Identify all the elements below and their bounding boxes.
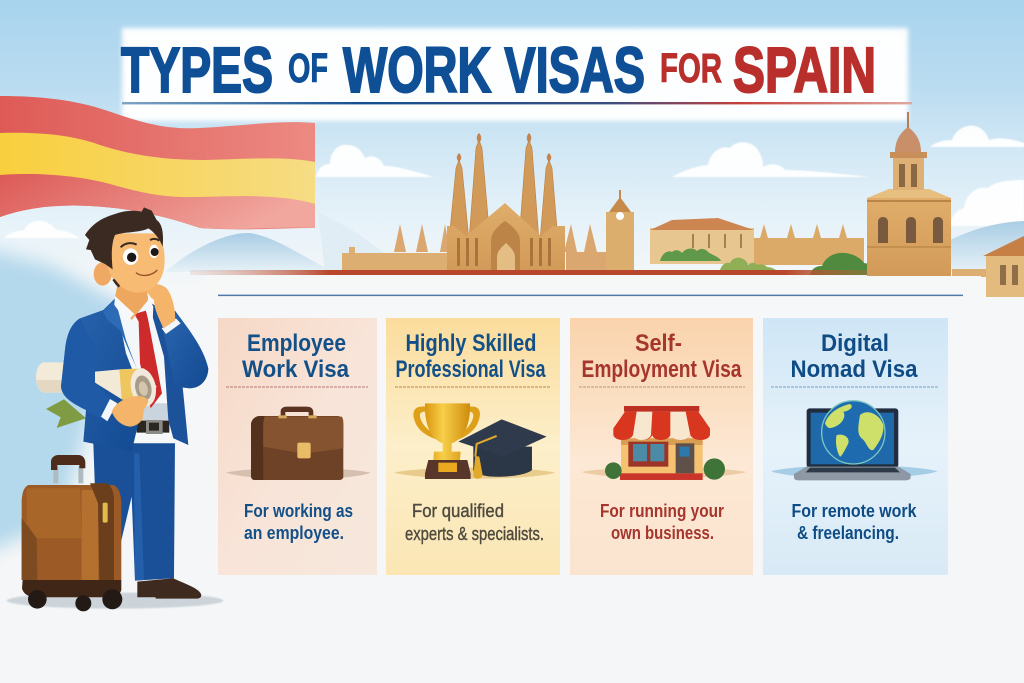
- icon: laptop with globe: [771, 401, 938, 480]
- ground line: [190, 270, 890, 275]
- face: [107, 233, 165, 293]
- heading: Self-: [635, 330, 682, 357]
- city skyline: [190, 112, 1024, 297]
- panel: digital nomad visa: [763, 318, 948, 575]
- description: [600, 500, 724, 543]
- description: experts & specialists.: [405, 523, 544, 544]
- heading: Employee: [247, 330, 346, 357]
- bell tower: [867, 112, 951, 276]
- heading: [790, 330, 918, 383]
- title: OF: [288, 45, 328, 91]
- heading: Highly Skilled: [406, 330, 536, 357]
- scroll in arm: [95, 366, 159, 409]
- description: & freelancing.: [797, 522, 899, 543]
- hair: [85, 207, 163, 269]
- description: For qualified: [412, 500, 504, 521]
- suitcase: [22, 483, 122, 611]
- palace: [650, 218, 754, 264]
- panel: highly skilled professional visa: [386, 318, 560, 575]
- heading: [242, 330, 350, 383]
- description: For working as: [244, 500, 353, 521]
- tie: [134, 311, 162, 408]
- title: SPAIN: [733, 34, 876, 106]
- panel: self-employment visa: [570, 318, 753, 575]
- cathedral: [342, 133, 606, 271]
- icon: trophy and graduation cap: [394, 403, 555, 479]
- character: traveller: [7, 207, 223, 611]
- title banner: [121, 28, 912, 121]
- sleeve over scroll: [61, 318, 113, 420]
- scroll behind the body: [36, 362, 67, 393]
- distant mountains: [165, 212, 1024, 272]
- heading: Work Visa: [242, 356, 350, 383]
- description: For remote work: [792, 500, 917, 521]
- description: [792, 500, 917, 543]
- raised hand: [146, 284, 175, 328]
- description: an employee.: [244, 522, 344, 543]
- title: [121, 34, 876, 106]
- forearm sleeve: [163, 311, 208, 388]
- smile: [136, 270, 157, 275]
- description: [244, 500, 353, 543]
- heading: [582, 330, 742, 383]
- heading: Digital: [821, 330, 889, 357]
- icon: shop: [582, 406, 746, 480]
- arcade: [754, 224, 864, 265]
- panel: employee work visa: [218, 318, 377, 575]
- clouds: [4, 126, 1024, 238]
- title: TYPES: [121, 34, 273, 106]
- heading: Employment Visa: [582, 356, 742, 383]
- description: [405, 500, 544, 544]
- title: WORK VISAS: [343, 34, 645, 106]
- title: FOR: [660, 45, 722, 91]
- description: own business.: [611, 522, 714, 543]
- icon: briefcase: [226, 407, 371, 480]
- clock tower: [606, 190, 634, 271]
- neck: [115, 285, 148, 320]
- Spanish flag: [0, 96, 315, 229]
- eyes: [121, 239, 159, 265]
- description: For running your: [600, 500, 724, 521]
- trousers: [93, 443, 175, 581]
- jacket: [61, 298, 138, 452]
- ground shadow: [7, 593, 223, 609]
- heading: Professional Visa: [396, 356, 546, 383]
- suitcase handle: [51, 455, 85, 483]
- shoe: [137, 578, 201, 599]
- heading: Nomad Visa: [790, 356, 918, 383]
- heading: [396, 330, 546, 383]
- cuffs: [162, 318, 181, 334]
- right building: [952, 236, 1024, 297]
- belt: [137, 421, 169, 433]
- ear: [94, 262, 112, 286]
- lower white band: [205, 276, 981, 296]
- holding hand: [112, 396, 148, 427]
- trees: [660, 249, 890, 275]
- leaf: [46, 399, 86, 428]
- shirt: [115, 297, 168, 420]
